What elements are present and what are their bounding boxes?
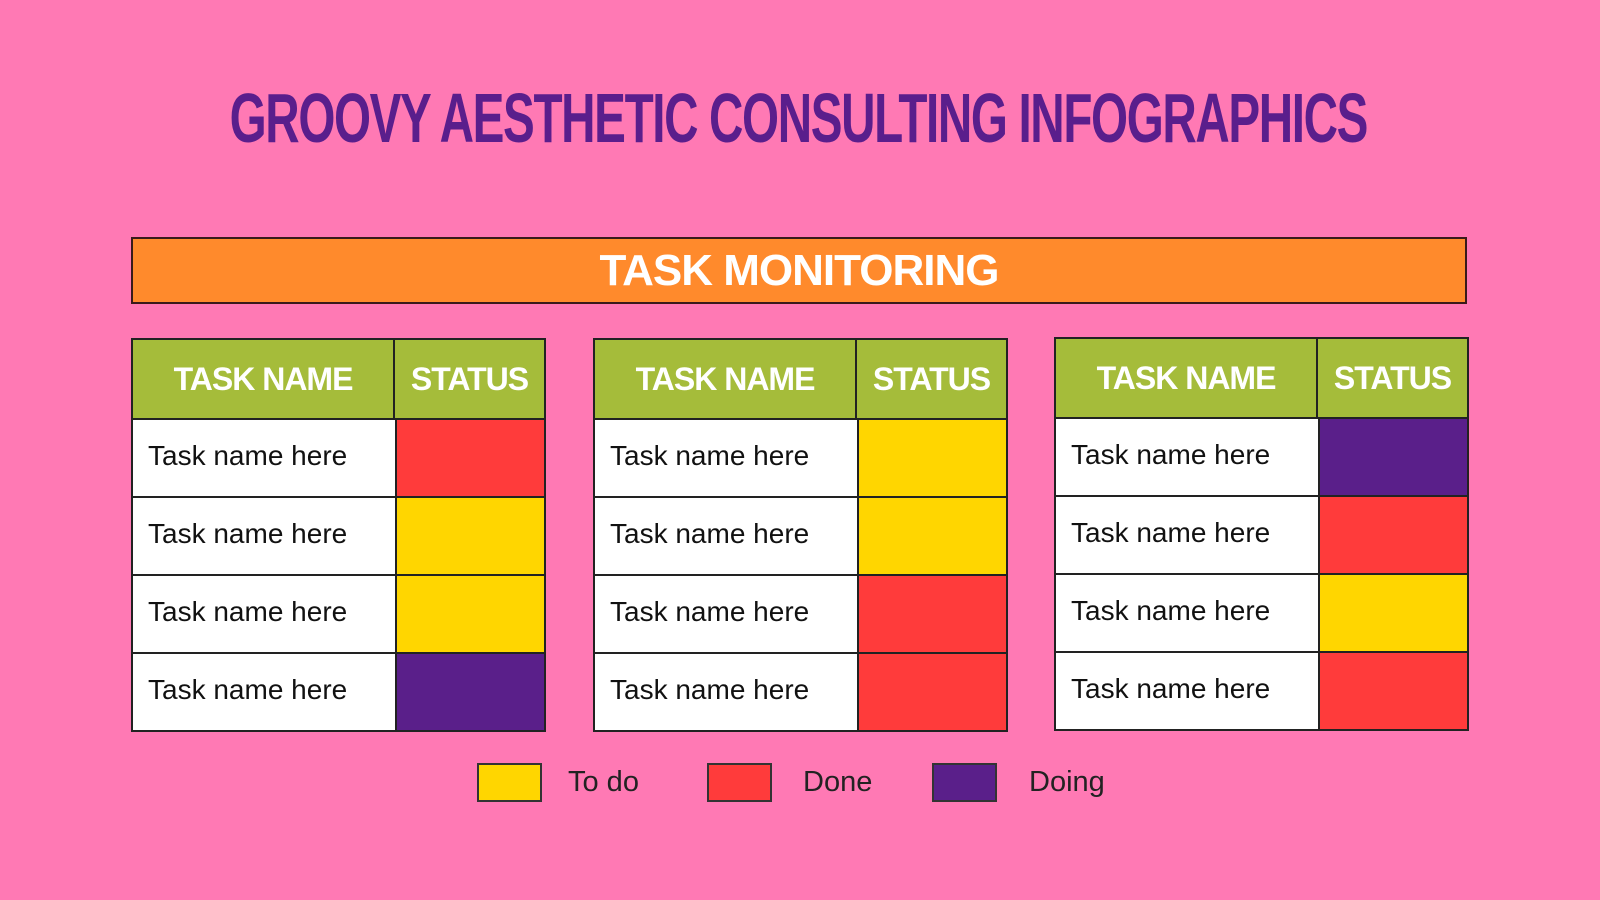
- legend: To do: [568, 766, 639, 798]
- table 3: STATUS: [1334, 360, 1451, 396]
- table 1: Task name here: [148, 596, 347, 627]
- table 1: Task name here: [148, 440, 347, 471]
- legend: Doing: [1029, 766, 1105, 798]
- legend: [477, 763, 1105, 802]
- table 2: Task name here: [610, 518, 809, 549]
- table 2: Task name here: [610, 440, 809, 471]
- table 3: Task name here: [1071, 595, 1270, 626]
- legend: doing: [932, 763, 997, 802]
- header bar: task monitoring: [131, 237, 1467, 304]
- table 2: TASK NAME: [636, 361, 814, 397]
- table 2: Task name here: [610, 674, 809, 705]
- table 1: Task name here: [148, 518, 347, 549]
- table 2: [593, 338, 1008, 732]
- table 2: STATUS: [873, 361, 990, 397]
- header bar: task monitoring: TASK MONITORING: [600, 246, 998, 295]
- table 2: Task name here: [610, 596, 809, 627]
- table 1: TASK NAME: [174, 361, 352, 397]
- table 3: TASK NAME: [1097, 360, 1275, 396]
- table 1: [131, 338, 546, 732]
- legend: to do: [477, 763, 542, 802]
- table 1: Task name here: [148, 674, 347, 705]
- table 1: STATUS: [411, 361, 528, 397]
- table 3: Task name here: [1071, 517, 1270, 548]
- legend: Done: [803, 766, 872, 798]
- legend: done: [707, 763, 772, 802]
- table 3: Task name here: [1071, 673, 1270, 704]
- table 3: [1054, 337, 1469, 731]
- title: GROOVY AESTHETIC CONSULTING INFOGRAPHICS: [230, 79, 1367, 157]
- table 3: Task name here: [1071, 439, 1270, 470]
